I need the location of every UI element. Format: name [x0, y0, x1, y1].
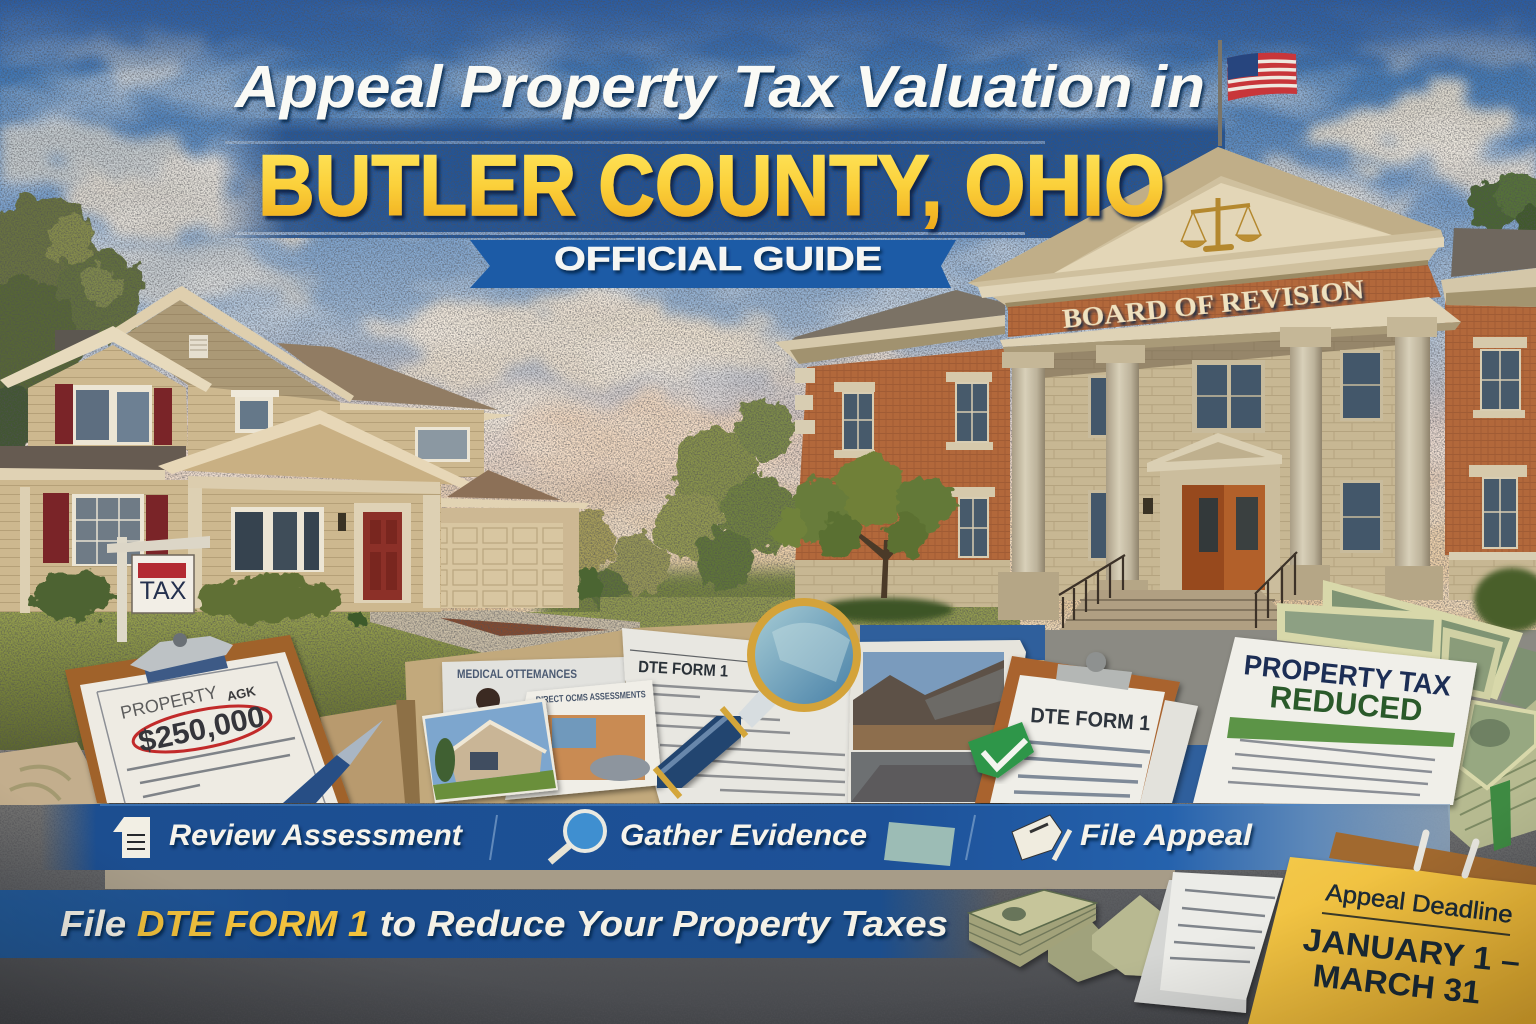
upper storey [0, 286, 514, 477]
step: review assessment [113, 817, 464, 858]
assessed value: $250,000 [136, 700, 268, 759]
pen [283, 720, 383, 803]
clipboard: property assessment: AGK [226, 683, 257, 704]
courthouse wing windows [834, 337, 1527, 557]
icon: magnifier [550, 811, 605, 862]
clipboard: DTE form 1: DTE FORM 1 [1030, 704, 1151, 735]
Board of Revision lettering: BOARD OF REVISION [1061, 274, 1366, 334]
house photo [422, 698, 558, 803]
call to action bar: File DTE FORM 1 to Reduce Your Property Taxes [60, 903, 948, 944]
bill fan [1092, 895, 1165, 977]
portrait document [442, 657, 625, 785]
assessment report: DIRECT OCMS ASSESSMENTS [536, 689, 646, 706]
step: file appeal: File Appeal [1080, 819, 1253, 852]
windows upper [55, 384, 470, 462]
inspection photos [848, 640, 1026, 803]
clipboard: property assessment [65, 633, 350, 803]
front door [1143, 433, 1282, 593]
green check badge [968, 722, 1034, 778]
stone centre wall [1040, 318, 1400, 600]
house [0, 286, 603, 642]
call to action bar [0, 890, 1000, 958]
stack 2 [1048, 920, 1118, 982]
assessment report [505, 680, 662, 800]
yard sign TAX [107, 536, 210, 642]
yard sign TAX: TAX [140, 577, 187, 605]
official guide ribbon: OFFICIAL GUIDE [554, 240, 882, 277]
stack 1 [969, 890, 1096, 967]
cash stacks [969, 890, 1165, 982]
courthouse [775, 147, 1536, 632]
appeal deadline calendar [1248, 832, 1536, 1024]
document table backdrop [405, 622, 1215, 803]
title banner [215, 118, 1225, 238]
trees behind house [0, 169, 1536, 550]
appeal deadline calendar: JANUARY 1 – [1301, 921, 1522, 980]
pediment and entablature [968, 147, 1461, 356]
distant trees in centre [540, 400, 820, 630]
magnifying glass [655, 602, 857, 797]
porch roof and lower storey [0, 410, 589, 613]
step: review assessment: Review Assessment [169, 819, 464, 852]
step: file appeal [1012, 815, 1253, 860]
shrubs [32, 567, 603, 624]
bills fan [1277, 580, 1536, 712]
entrance steps and railings [1059, 552, 1300, 630]
money pile right [1277, 580, 1536, 851]
property tax reduced document [1193, 637, 1477, 805]
property tax reduced document: PROPERTY TAX [1242, 649, 1453, 702]
icon: document [113, 817, 150, 858]
clipboard: DTE form 1 [975, 652, 1198, 803]
step: gather evidence [550, 811, 955, 866]
sky with clouds [0, 0, 1536, 640]
appeal deadline calendar: Appeal Deadline [1324, 879, 1514, 929]
appeal deadline calendar: MARCH 31 [1311, 957, 1482, 1011]
title line 2: BUTLER COUNTY, OHIO [258, 138, 1165, 234]
American flag [1218, 40, 1297, 146]
DTE form sheet [622, 628, 850, 803]
property tax reduced document: REDUCED [1268, 679, 1424, 728]
official guide ribbon [470, 240, 956, 288]
bill stack with band [1445, 700, 1536, 851]
step: gather evidence: Gather Evidence [620, 819, 867, 852]
portrait document: MEDICAL OTTEMANCES [457, 669, 577, 681]
foreground tree [772, 454, 953, 598]
steps bar [40, 804, 1450, 889]
scales of justice icon [1181, 198, 1261, 249]
clipboard: property assessment: PROPERTY [119, 682, 219, 723]
metal clip [130, 633, 233, 683]
metal clip [1056, 652, 1132, 690]
title line 1: Appeal Property Tax Valuation in [233, 54, 1205, 120]
folder tabs [396, 700, 420, 803]
lawn and ground [0, 597, 1536, 1024]
title text [233, 54, 1205, 288]
icon: filing box [1012, 815, 1070, 860]
stack of filed papers [1134, 872, 1283, 1013]
evidence photos and forms [396, 602, 1026, 803]
columns [998, 317, 1443, 620]
DTE form sheet: DTE FORM 1 [638, 658, 729, 681]
brick wings [775, 228, 1536, 607]
